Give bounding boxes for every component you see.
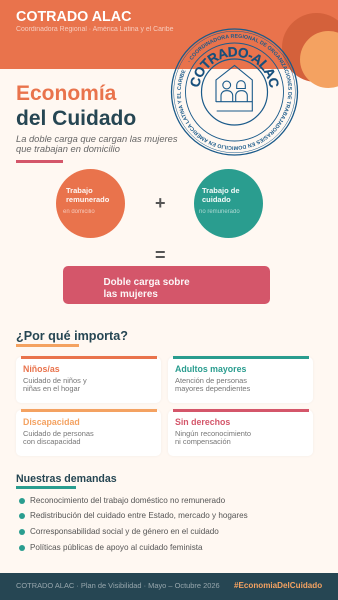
care work label: cuidado (202, 195, 231, 204)
care work note: no remunerado (199, 208, 240, 214)
circle: care work (194, 169, 263, 238)
title underline (16, 160, 63, 163)
result text: Doble carga sobre (104, 277, 190, 288)
bullet two (19, 513, 25, 519)
card text: niñas en el hogar (23, 384, 80, 393)
demand three: Corresponsabilidad social y de género en el cuidado (30, 527, 219, 536)
result box (62, 266, 270, 304)
care work label: Trabajo de (202, 186, 240, 194)
demand four: Políticas públicas de apoyo al cuidado feminista (30, 543, 203, 552)
card: no rights (168, 410, 313, 456)
card text: Atención de personas (175, 376, 247, 384)
demands list (19, 496, 248, 552)
card heading: Discapacidad (23, 417, 80, 427)
footer band (0, 573, 338, 600)
subtitle (16, 134, 178, 154)
card text (23, 428, 94, 446)
demands underline (16, 486, 76, 489)
card heading: Sin derechos (175, 417, 230, 427)
care work label (202, 186, 240, 204)
header title: COTRADO ALAC (16, 9, 131, 25)
header subtitle: Coordinadora Regional · América Latina y el Caribe (16, 26, 173, 32)
paid work note: en domicilio (63, 208, 95, 214)
light orange circle (300, 31, 338, 88)
circle: paid work (56, 169, 125, 238)
demand two: Redistribución del cuidado entre Estado, mercado y hogares (30, 511, 248, 520)
card text: ni compensación (175, 437, 231, 446)
demand one: Reconocimiento del trabajo doméstico no remunerado (30, 496, 225, 505)
card text (175, 428, 251, 446)
hashtag: #EconomiaDelCuidado (234, 581, 322, 590)
icon: house with two people (216, 66, 252, 111)
card text: con discapacidad (23, 437, 80, 446)
card heading: Adultos mayores (175, 364, 246, 374)
card text: Cuidado de niños y (23, 376, 87, 384)
card heading: Niños/as (23, 364, 60, 374)
card text (175, 376, 250, 393)
card: children (16, 357, 161, 403)
result text (104, 277, 190, 300)
plus sign: + (155, 193, 166, 213)
equals sign: = (155, 244, 166, 264)
bullet three (19, 529, 25, 535)
title line one: Economía (16, 82, 116, 105)
paid work label (66, 186, 109, 204)
paid work label: remunerado (66, 195, 109, 204)
card text: Cuidado de personas (23, 428, 94, 438)
stamp logo (170, 28, 298, 156)
title line two: del Cuidado (16, 107, 136, 130)
main title (16, 82, 136, 130)
section heading: demands: Nuestras demandas (16, 473, 117, 485)
card: older adults (168, 357, 313, 403)
bullet four (19, 545, 25, 551)
bullet one (19, 498, 25, 504)
subtitle: que trabajan en domicilio (16, 144, 120, 154)
card text (23, 376, 87, 393)
footer text: COTRADO ALAC · Plan de Visibilidad · Mayo – Octubre 2026 (16, 581, 220, 590)
card: disability (16, 410, 161, 456)
stamp ring text: · COORDINADORA REGIONAL DE ORGANIZACIONES DE TRABAJADORAS/ES EN DOMICILIO EN AMÉRICA LATINA Y EL CARIBE (176, 34, 292, 150)
header band (0, 0, 338, 69)
heading underline (16, 344, 79, 347)
subtitle: La doble carga que cargan las mujeres (16, 134, 178, 144)
card text: Ningún reconocimiento (175, 428, 251, 438)
section heading: why it matters: ¿Por qué importa? (16, 329, 128, 343)
stamp name: COTRADO-ALAC (190, 47, 279, 88)
result text: las mujeres (104, 289, 158, 300)
paid work label: Trabajo (66, 186, 93, 194)
decorative circles (282, 13, 338, 82)
card text: mayores dependientes (175, 384, 250, 393)
